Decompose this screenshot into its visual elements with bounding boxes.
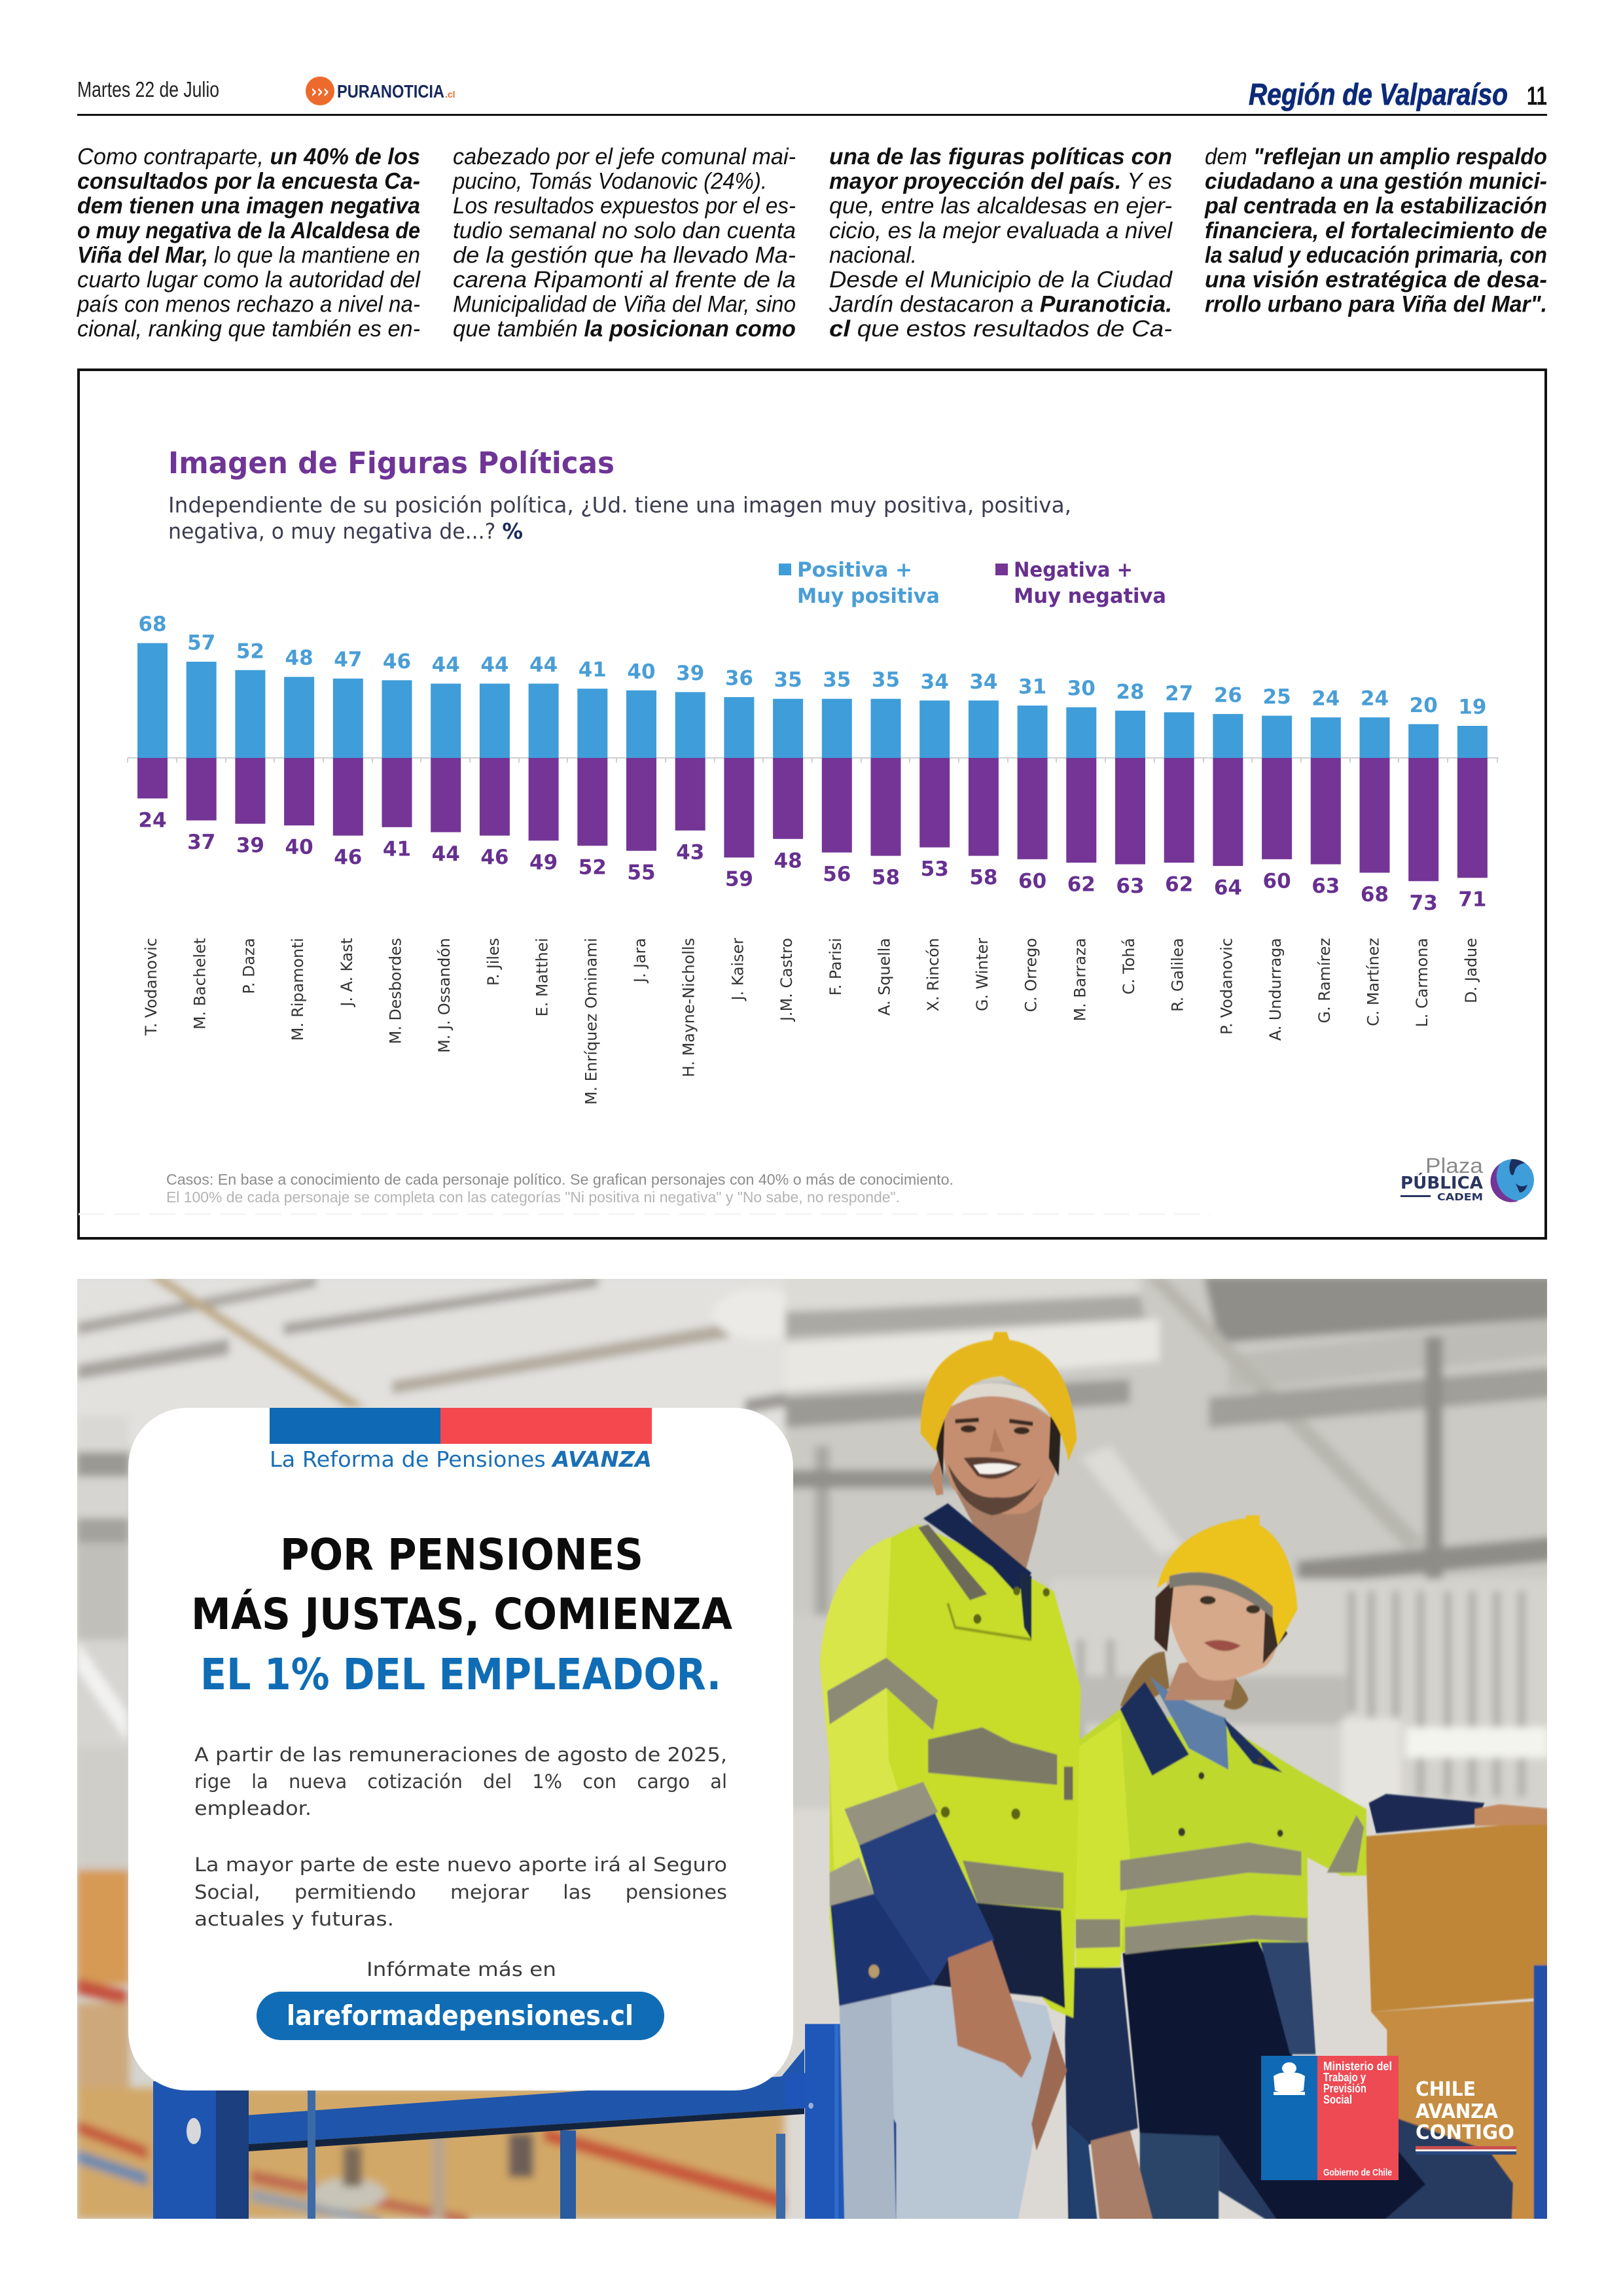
- candidate names axis: A. Squella: [876, 938, 894, 1016]
- logo: Ministerio del Trabajo: Previsión: [1323, 2082, 1366, 2095]
- candidate names axis: X. Rincón: [924, 938, 942, 1011]
- paragraph 2: La mayor parte de este nuevo aporte irá al Seguro: [194, 1854, 727, 1876]
- logo: Chile Avanza Contigo: CONTIGO: [1416, 2121, 1514, 2144]
- candidate names axis: P. Jiles: [484, 938, 503, 986]
- article text column 4: financiera, el fortalecimiento de: [1205, 218, 1547, 243]
- call to action text: Infórmate más en: [366, 1958, 556, 1981]
- logo: Puranoticia: .cl: [445, 89, 455, 99]
- candidate names axis: M. J. Ossandón: [435, 938, 454, 1053]
- ad card: [128, 1408, 793, 2090]
- article text column 2: cabezado por el jefe comunal mai-: [453, 144, 796, 170]
- logo: Ministerio del Trabajo: [1261, 2056, 1399, 2180]
- bar: M. Ripamonti: 40: [285, 836, 313, 859]
- bar: P. Daza: 39: [236, 834, 264, 857]
- bar: J. Jara: 40: [627, 660, 656, 683]
- bar: J. Kaiser: 59: [725, 868, 753, 891]
- footnote: Casos: En base a conocimiento de cada personaje político. Se grafican personajes con 40% o más de conocimiento.: [166, 1171, 954, 1188]
- candidate names axis: T. Vodanovic: [142, 938, 160, 1036]
- article text column 2: Municipalidad de Viña del Mar, sino: [453, 292, 796, 317]
- article text column 3: cicio, es la mejor evaluada a nivel: [829, 218, 1173, 243]
- bar: J. Jara: [626, 660, 656, 884]
- chart subtitle: Independiente de su posición política, ¿Ud. tiene una imagen muy positiva, positiva,: [168, 492, 1071, 518]
- bar: F. Parisi: [822, 668, 852, 886]
- bar: J. Jara: 55: [627, 861, 656, 884]
- legend: positive: Positiva +: [797, 558, 912, 582]
- headline: POR PENSIONES: [280, 1530, 643, 1580]
- bar: M. J. Ossandón: 44: [432, 842, 460, 866]
- page number: 11: [1527, 82, 1547, 111]
- logo: Puranoticia: PURANOTICIA: [337, 81, 444, 101]
- bar: M. Enríquez Ominami: 52: [579, 856, 607, 880]
- bar: R. Galilea: [1164, 682, 1194, 897]
- icon: crest: [1274, 2062, 1305, 2095]
- bar: C. Martínez: 68: [1361, 883, 1389, 906]
- bar: X. Rincón: [919, 670, 950, 881]
- photo: man worker: [820, 1332, 1080, 2227]
- logo: Ministerio del Trabajo: Gobierno de Chile: [1323, 2167, 1392, 2178]
- bar: A. Undurraga: [1262, 685, 1292, 893]
- legend: positive: [779, 558, 940, 608]
- footnote: El 100% de cada personaje se completa con las categorías "Ni positiva ni negativa" y "No sabe, no responde".: [166, 1189, 900, 1206]
- bar: T. Vodanovic: 68: [138, 613, 167, 636]
- bar: M. Bachelet: 37: [187, 831, 215, 854]
- bar: C. Orrego: [1018, 675, 1048, 893]
- article text column 4: [1204, 144, 1547, 317]
- bar: C. Martínez: 24: [1361, 687, 1389, 711]
- article text column 3: cl que estos resultados de Ca-: [829, 316, 1172, 342]
- bar: C. Tohá: 28: [1116, 680, 1145, 704]
- candidate names axis: F. Parisi: [827, 938, 845, 996]
- chart subtitle: negativa, o muy negativa de...? %: [168, 518, 523, 544]
- logo: Ministerio del Trabajo: Social: [1323, 2093, 1352, 2106]
- bar: E. Matthei: [529, 653, 559, 874]
- bar: P. Jiles: 46: [480, 846, 508, 869]
- article text column 4: dem "reflejan un amplio respaldo: [1205, 144, 1547, 170]
- bar: A. Undurraga: 60: [1263, 869, 1291, 893]
- logo: Plaza Pública Cadem: CADEM: [1437, 1191, 1483, 1203]
- candidate names axis: D. Jadue: [1462, 938, 1480, 1003]
- logo: Chile Avanza Contigo: AVANZA: [1416, 2100, 1499, 2123]
- logo: Puranoticia: [306, 77, 455, 105]
- bar: M. Barraza: 30: [1067, 677, 1096, 700]
- article text column 2: tudio semanal no solo dan cuenta: [453, 218, 796, 243]
- candidate names axis: C. Martínez: [1364, 938, 1382, 1026]
- article text column 1: Como contraparte, un 40% de los: [77, 144, 420, 170]
- logo: Ministerio del Trabajo: Ministerio del: [1323, 2060, 1392, 2073]
- bar: C. Tohá: 63: [1116, 874, 1145, 898]
- bar: A. Squella: 58: [872, 866, 900, 889]
- headline: [191, 1530, 732, 1700]
- section title: Región de Valparaíso: [1249, 77, 1508, 111]
- candidate names axis: [142, 938, 1480, 1105]
- article text column 4: una visión estratégica de desa-: [1205, 267, 1547, 293]
- bar: P. Vodanovic: 64: [1214, 876, 1242, 900]
- article text column 1: consultados por la encuesta Ca-: [77, 169, 420, 194]
- bar: D. Jadue: 19: [1458, 695, 1486, 719]
- bar: M. J. Ossandón: [431, 653, 461, 866]
- candidate names axis: C. Tohá: [1120, 938, 1138, 994]
- bar: L. Carmona: [1408, 694, 1438, 915]
- bar: L. Carmona: 20: [1410, 694, 1438, 717]
- headline: MÁS JUSTAS, COMIENZA: [191, 1588, 732, 1640]
- bar: P. Jiles: [480, 653, 510, 869]
- article text column 3: una de las figuras políticas con: [829, 144, 1172, 170]
- bar: J.M. Castro: 48: [774, 849, 802, 872]
- candidate names axis: R. Galilea: [1169, 938, 1187, 1012]
- footnote: [166, 1171, 954, 1206]
- candidate names axis: L. Carmona: [1413, 938, 1431, 1027]
- bar: J. A. Kast: 47: [334, 648, 362, 672]
- bar: M. Ripamonti: 48: [285, 647, 313, 670]
- bar: F. Parisi: 35: [823, 668, 851, 692]
- bar: X. Rincón: 34: [921, 670, 949, 694]
- bar: M. Bachelet: [187, 631, 217, 854]
- logo: Plaza Pública Cadem: PÚBLICA: [1400, 1172, 1483, 1193]
- paragraph 1: A partir de las remuneraciones de agosto de 2025,: [194, 1744, 727, 1766]
- article text column 2: que también la posicionan como: [453, 316, 796, 342]
- bar: M. Desbordes: 46: [383, 650, 411, 673]
- bar: R. Galilea: 62: [1165, 873, 1193, 897]
- bar: A. Squella: 35: [872, 668, 900, 692]
- paragraph 2: Social, permitiendo mejorar las pensiones: [194, 1881, 727, 1903]
- candidate names axis: P. Vodanovic: [1217, 938, 1236, 1035]
- bar: C. Orrego: 31: [1018, 675, 1046, 699]
- bar: D. Jadue: [1457, 695, 1488, 912]
- bar: J.M. Castro: [773, 668, 803, 872]
- header: [77, 77, 1547, 111]
- logo: Ministerio del Trabajo: Trabajo y: [1323, 2071, 1366, 2084]
- bar: H. Mayne-Nicholls: [675, 662, 705, 864]
- flag stripe: [270, 1408, 652, 1444]
- article text column 1: dem tienen una imagen negativa: [77, 193, 420, 219]
- legend: negative: [995, 558, 1166, 608]
- bar: G. Winter: 34: [969, 670, 997, 694]
- chart title: Imagen de Figuras Políticas: [168, 446, 615, 480]
- bar: T. Vodanovic: 24: [138, 808, 167, 832]
- logo: Chile Avanza Contigo: CHILE: [1416, 2078, 1476, 2101]
- bar: J. Kaiser: [724, 667, 754, 891]
- article text column 3: [829, 144, 1173, 342]
- bar: M. J. Ossandón: 44: [432, 653, 460, 677]
- candidate names axis: J. Jara: [631, 938, 649, 984]
- reform tagline: La Reforma de Pensiones AVANZA: [270, 1446, 652, 1472]
- bar: M. Barraza: [1066, 677, 1096, 897]
- legend: negative: Negativa +: [1014, 558, 1133, 582]
- paragraph 2: actuales y futuras.: [194, 1908, 394, 1930]
- bar: M. Desbordes: 41: [383, 837, 411, 861]
- article text column 1: país con menos rechazo a nivel na-: [77, 292, 420, 317]
- article text column 4: rrollo urbano para Viña del Mar".: [1205, 292, 1547, 317]
- bar: G. Winter: 58: [969, 866, 997, 889]
- bar: J. Kaiser: 36: [725, 667, 753, 691]
- candidate names axis: M. Enríquez Ominami: [582, 938, 600, 1105]
- logo: Chile Avanza Contigo: [1416, 2078, 1516, 2155]
- article text column 3: nacional.: [829, 242, 917, 268]
- article text column 2: Los resultados expuestos por el es-: [453, 193, 796, 219]
- bar: H. Mayne-Nicholls: 39: [676, 662, 704, 685]
- candidate names axis: J. A. Kast: [338, 938, 356, 1008]
- bar: G. Ramírez: [1311, 687, 1341, 898]
- bar: P. Jiles: 44: [480, 653, 508, 677]
- panel: chart: [79, 370, 1546, 1238]
- photo: warehouse background: [72, 1276, 1554, 2233]
- candidate names axis: J.M. Castro: [777, 938, 796, 1022]
- article text column 3: Jardín destacaron a Puranoticia.: [829, 292, 1172, 317]
- article text column 3: mayor proyección del país. Y es: [829, 169, 1172, 194]
- article text column 1: [77, 144, 421, 342]
- article text column 2: [452, 144, 796, 342]
- bar: X. Rincón: 53: [921, 857, 949, 881]
- advertisement panel: [72, 1276, 1554, 2233]
- candidate names axis: E. Matthei: [533, 938, 552, 1016]
- chart subtitle: [168, 492, 1071, 544]
- bar: M. Barraza: 62: [1067, 873, 1096, 897]
- bar: C. Orrego: 60: [1018, 869, 1046, 893]
- legend: positive: Muy positiva: [797, 584, 940, 608]
- candidate names axis: J. Kaiser: [728, 938, 747, 1001]
- photo: woman worker: [1065, 1515, 1554, 2227]
- bar: G. Winter: [969, 670, 999, 889]
- candidate names axis: C. Orrego: [1022, 938, 1041, 1012]
- bar: C. Tohá: [1115, 680, 1145, 898]
- url pill button: lareformadepensiones.cl: [287, 2000, 633, 2032]
- bar: G. Ramírez: 63: [1311, 874, 1340, 898]
- article text column 1: Viña del Mar, lo que la mantiene en: [77, 242, 420, 268]
- bar: P. Vodanovic: [1213, 683, 1243, 900]
- bar: P. Daza: [235, 639, 265, 857]
- bar: C. Martínez: [1360, 687, 1390, 906]
- article text column 4: ciudadano a una gestión munici-: [1205, 169, 1547, 194]
- bar: R. Galilea: 27: [1165, 682, 1193, 706]
- url pill button: [257, 1992, 664, 2040]
- bar: D. Jadue: 71: [1458, 888, 1486, 912]
- article text column 2: pucino, Tomás Vodanovic (24%).: [452, 169, 767, 194]
- bar: G. Ramírez: 24: [1311, 687, 1340, 711]
- bar: F. Parisi: 56: [823, 863, 851, 886]
- bar: P. Daza: 52: [236, 639, 264, 663]
- bar: A. Undurraga: 25: [1263, 685, 1291, 709]
- paragraph 1: rige la nueva cotización del 1% con cargo al: [194, 1770, 727, 1793]
- candidate names axis: M. Ripamonti: [289, 938, 307, 1041]
- bar: J. A. Kast: [333, 648, 363, 869]
- candidate names axis: P. Daza: [240, 938, 258, 994]
- paragraph 2: [194, 1854, 727, 1930]
- candidate names axis: M. Desbordes: [386, 938, 404, 1044]
- bar: M. Enríquez Ominami: 41: [579, 658, 607, 682]
- article text column 1: cional, ranking que también es en-: [77, 316, 420, 342]
- bar: M. Bachelet: 57: [187, 631, 215, 655]
- article text column 4: la salud y educación primaria, con: [1205, 242, 1547, 268]
- article text column 1: o muy negativa de la Alcaldesa de: [77, 218, 420, 243]
- candidate names axis: G. Ramírez: [1315, 938, 1334, 1023]
- candidate names axis: M. Barraza: [1071, 938, 1089, 1021]
- headline: EL 1% DEL EMPLEADOR.: [200, 1649, 721, 1700]
- logo: Plaza Pública Cadem: [1400, 1154, 1534, 1203]
- article text column 2: carena Ripamonti al frente de la: [453, 267, 796, 293]
- bar: J. A. Kast: 46: [334, 846, 362, 869]
- bar: M. Enríquez Ominami: [577, 658, 607, 880]
- candidate names axis: M. Bachelet: [191, 938, 209, 1030]
- bar: E. Matthei: 44: [529, 653, 558, 677]
- legend: negative: Muy negativa: [1014, 584, 1166, 608]
- paragraph 1: empleador.: [194, 1797, 312, 1820]
- bar: H. Mayne-Nicholls: 43: [676, 840, 704, 864]
- paragraph 1: [194, 1744, 727, 1820]
- bar: P. Vodanovic: 26: [1214, 683, 1242, 707]
- photo: blue shelving: [153, 2024, 901, 2221]
- article text column 3: que, entre las alcaldesas en ejer-: [829, 193, 1172, 219]
- bar: M. Ripamonti: [284, 647, 314, 859]
- bar: M. Desbordes: [382, 650, 412, 861]
- article text column 1: cuarto lugar como la autoridad del: [77, 267, 421, 293]
- candidate names axis: H. Mayne-Nicholls: [680, 938, 698, 1077]
- bar: E. Matthei: 49: [529, 851, 558, 874]
- logo: Plaza Pública Cadem: Plaza: [1425, 1154, 1483, 1177]
- article text column 4: pal centrada en la estabilización: [1204, 193, 1547, 219]
- article text column 2: de la gestión que ha llevado Ma-: [453, 242, 796, 268]
- bar: J.M. Castro: 35: [774, 668, 802, 692]
- bar: T. Vodanovic: [137, 613, 168, 832]
- date: Martes 22 de Julio: [77, 77, 219, 101]
- bar: A. Squella: [870, 668, 901, 889]
- article text column 3: Desde el Municipio de la Ciudad: [829, 267, 1173, 293]
- candidate names axis: A. Undurraga: [1266, 938, 1285, 1041]
- bar: L. Carmona: 73: [1410, 891, 1438, 915]
- candidate names axis: G. Winter: [973, 938, 991, 1011]
- photo: boxes: [1365, 1821, 1554, 2227]
- logo: Puranoticia: ›››: [311, 81, 329, 102]
